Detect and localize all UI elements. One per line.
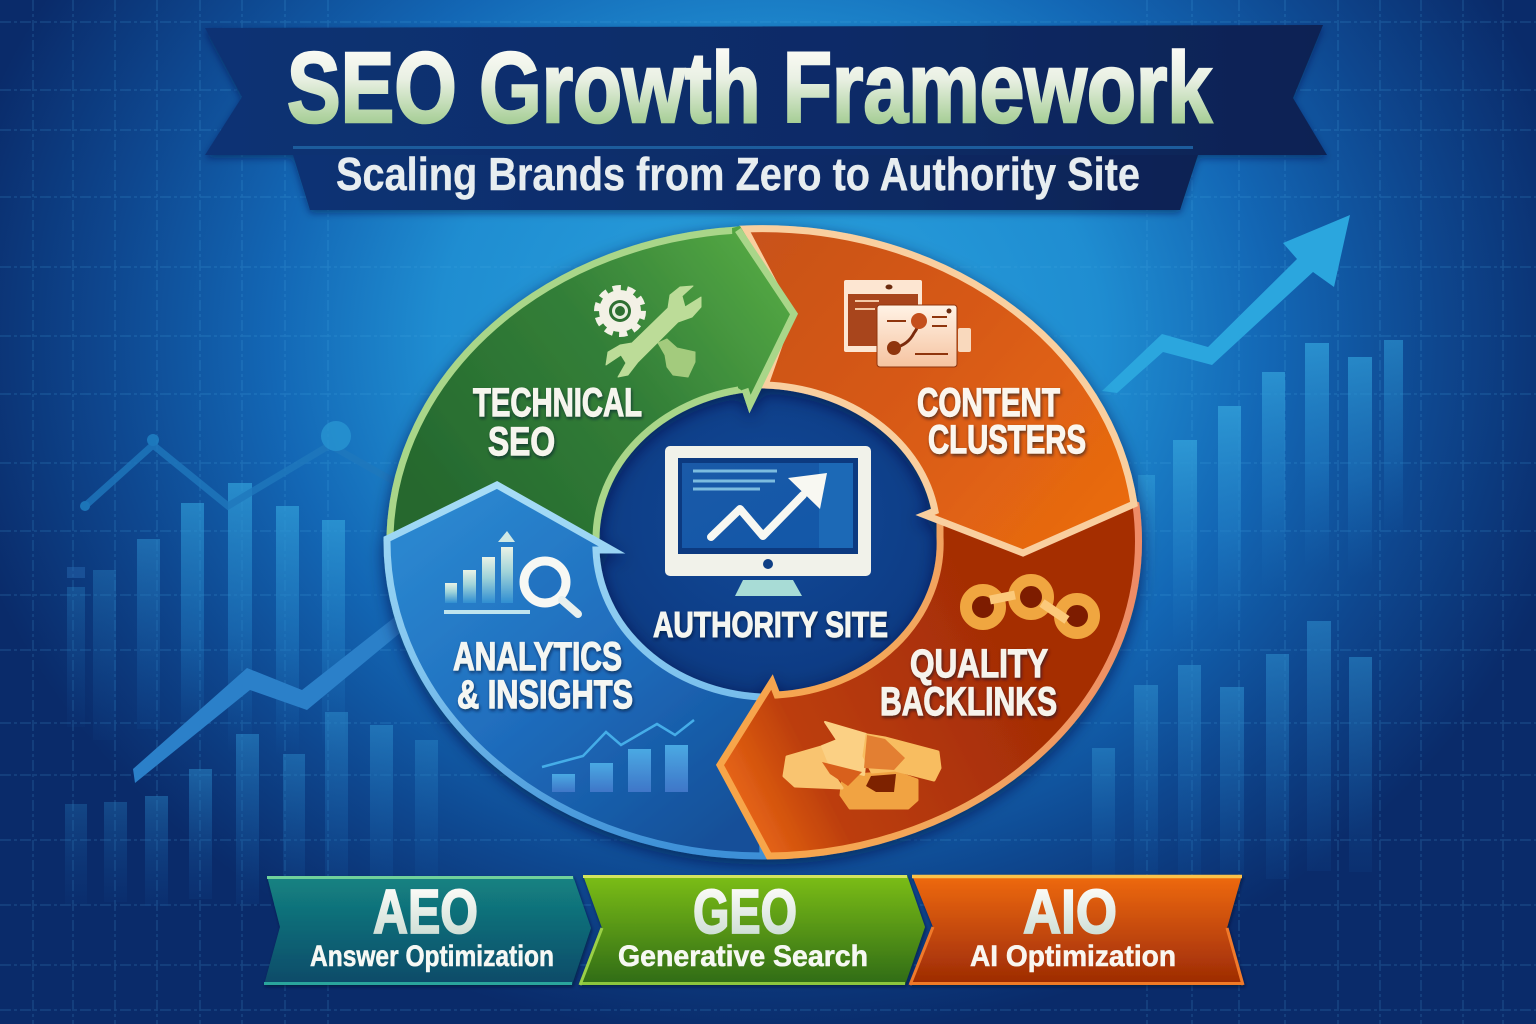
center: authority site: [653, 446, 888, 645]
chart: left lower background bars: [65, 712, 438, 906]
banner: GEO: Generative Search: [618, 940, 868, 973]
segment: content clusters: [745, 229, 1134, 553]
icon: broken link: [784, 722, 940, 808]
chart: left upper background bars: [67, 483, 345, 756]
banner: GEO: GEO: [693, 878, 797, 947]
icon: gear: [598, 288, 642, 334]
icon: small bar and line chart: [542, 720, 694, 792]
chart: right upper background bars: [1138, 340, 1403, 650]
label: quality backlinks: [880, 642, 1057, 724]
icon: chain links: [966, 580, 1094, 633]
title banner: [205, 25, 1327, 210]
arrow: right growth arrow: [1102, 215, 1350, 393]
banner: AIO: [910, 875, 1243, 985]
icon: monitor: [665, 446, 871, 596]
segment: analytics and insights: [387, 485, 763, 856]
label: authority site: AUTHORITY SITE: [653, 604, 888, 645]
banner: GEO: [580, 875, 925, 985]
icon: content windows: [844, 280, 971, 367]
label: analytics and insights: & INSIGHTS: [457, 673, 633, 717]
segment: quality backlinks: [720, 490, 1138, 856]
label: content clusters: CLUSTERS: [928, 418, 1086, 462]
banner: AIO: AI Optimization: [970, 940, 1176, 973]
label: technical SEO: TECHNICAL: [473, 381, 642, 425]
label: technical SEO: SEO: [488, 420, 555, 464]
label: technical SEO: [473, 381, 642, 464]
banner: AEO: [264, 876, 591, 985]
label: content clusters: CONTENT: [917, 381, 1060, 425]
banner: AEO: Answer Optimization: [310, 940, 554, 973]
title text: SEO Growth Framework: [287, 32, 1212, 144]
chart: right lower background bars: [1092, 621, 1372, 879]
subtitle text: Scaling Brands from Zero to Authority Site: [336, 148, 1140, 200]
label: quality backlinks: BACKLINKS: [880, 680, 1057, 724]
banner: AEO: AEO: [373, 878, 478, 947]
banner: AIO: AIO: [1023, 878, 1117, 947]
chart: left faint line: [80, 421, 395, 511]
icon: bars and magnifier: [444, 531, 578, 614]
label: content clusters: [917, 381, 1086, 462]
icon: wrenches: [606, 286, 701, 377]
arrow: left growth line: [133, 613, 400, 783]
segment: technical SEO: [390, 230, 794, 570]
label: quality backlinks: QUALITY: [910, 642, 1048, 686]
label: analytics and insights: [453, 635, 633, 717]
label: analytics and insights: ANALYTICS: [453, 635, 622, 679]
cycle ring: [387, 226, 1138, 856]
arrowhead: technical SEO over content clusters: [732, 226, 794, 404]
central hub disc: [580, 365, 960, 705]
